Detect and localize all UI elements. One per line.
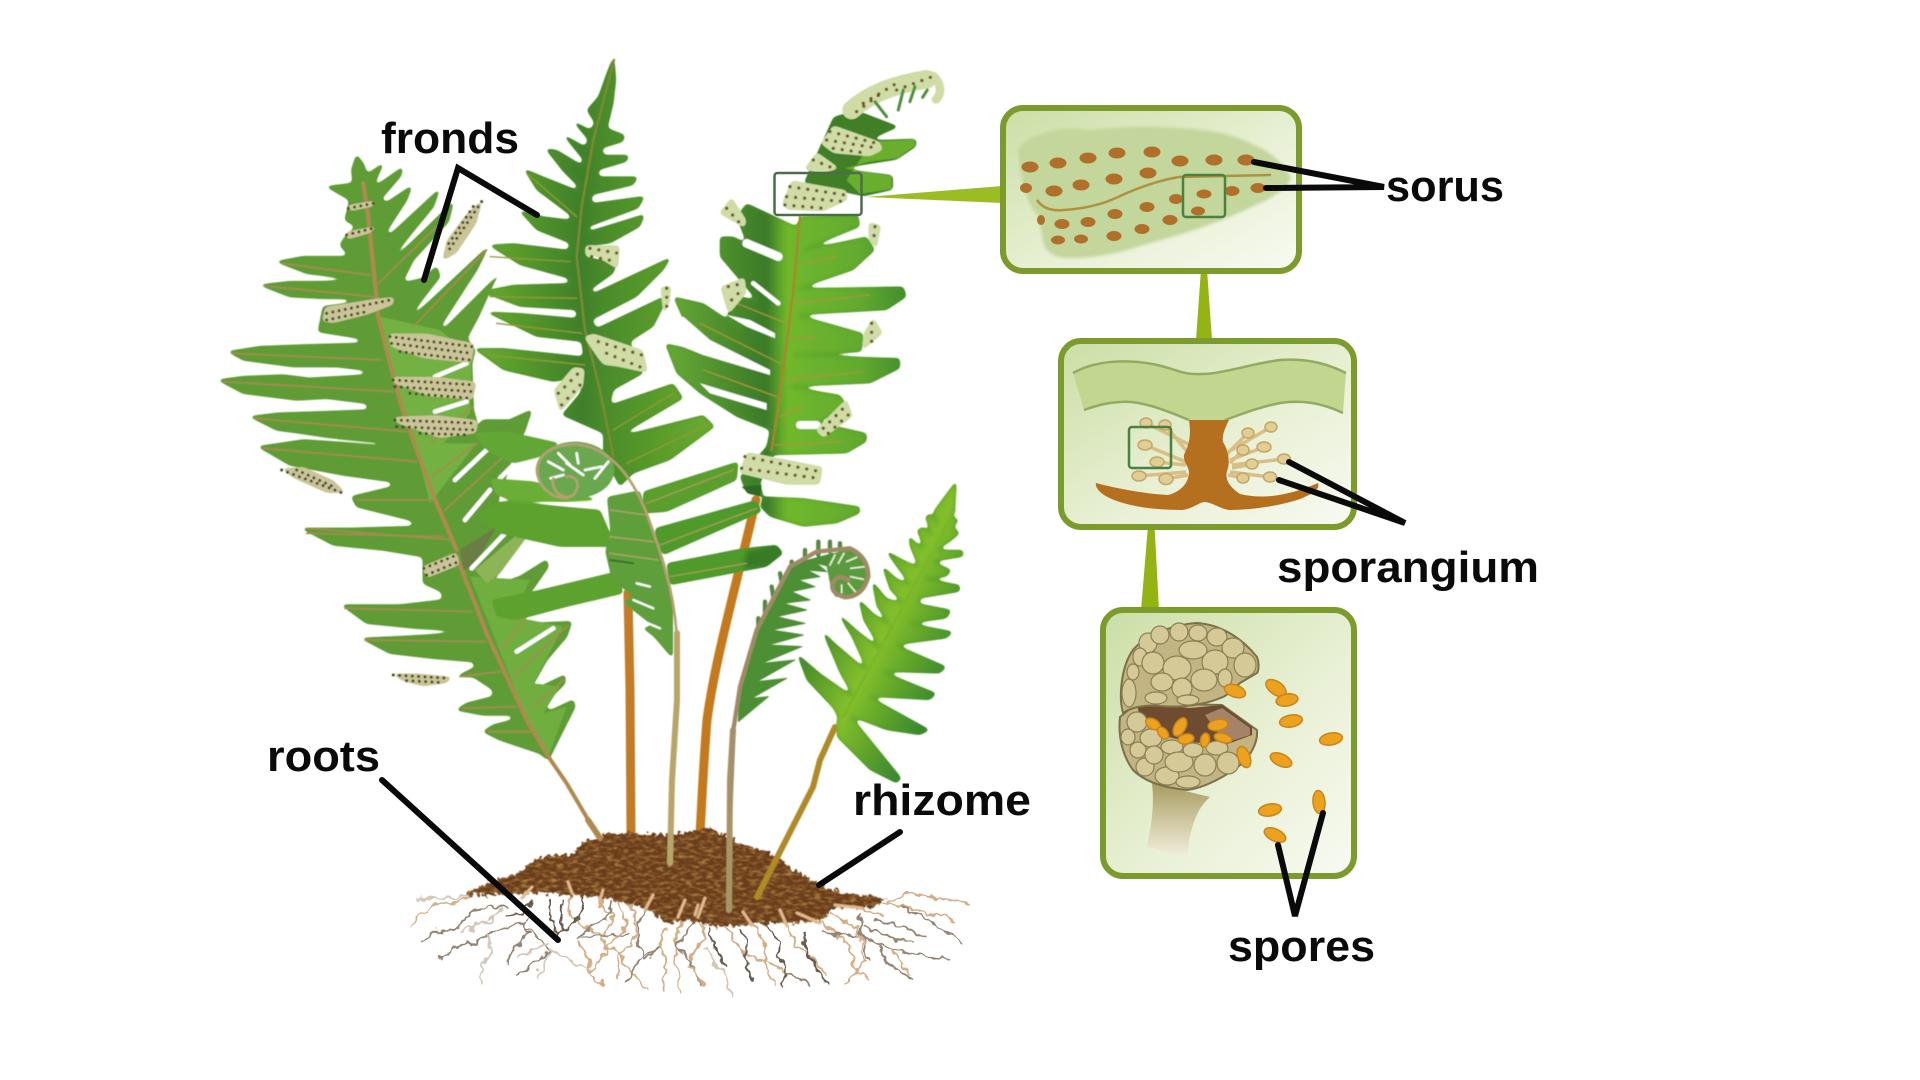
label: roots: [267, 732, 558, 940]
upper capsule: [1121, 623, 1259, 713]
lighter side of the blade: [470, 577, 567, 757]
label: rhizome: [819, 776, 1031, 885]
receptacle stalk: [1096, 420, 1318, 510]
fern plant illustration: [218, 55, 963, 927]
frond: fiddlehead leaves and crozier: [473, 432, 783, 660]
connector: frond to sorus panel: [866, 186, 1002, 203]
panel: sporangium cross-section: [1061, 341, 1354, 527]
label: sorus: [1254, 162, 1504, 211]
crozier coil: [536, 442, 614, 498]
spore patches on left frond: [280, 198, 483, 493]
label: fronds: [381, 114, 537, 280]
curled tip: [803, 110, 917, 197]
panel: spore release: [1103, 610, 1354, 876]
folded blade: [605, 490, 673, 660]
stems in front of the mound: [588, 633, 835, 910]
highlight box on sorus: [1183, 175, 1225, 217]
connector: sorus to sporangium panel: [1196, 227, 1212, 340]
spores: [1144, 676, 1343, 845]
frond: lower right frond: [797, 480, 963, 783]
frond: right fertile frond: [665, 75, 940, 527]
spore patches on central frond: [553, 245, 672, 413]
highlight box on sporangium: [1129, 427, 1171, 468]
sporangia stems: [1139, 423, 1284, 479]
label: roots: roots: [267, 732, 380, 781]
rootlets emerging from soil: [522, 882, 862, 926]
sporangia heads: [1132, 418, 1290, 484]
label: sorus: sorus: [1386, 162, 1504, 211]
right leaves of the central frond: [643, 462, 783, 585]
stems behind the mound: [628, 500, 756, 834]
panel: sorus: [1003, 108, 1299, 271]
label: spores: [1228, 813, 1375, 971]
sporangium stalk: [1147, 783, 1210, 857]
frond: central frond: [473, 55, 715, 487]
connector: sporangium to spore panel: [1141, 478, 1159, 610]
frond: left fertile frond: [218, 155, 598, 835]
label: sporangium: [1277, 462, 1539, 592]
capsule opening: [1137, 703, 1252, 745]
left leaves: [473, 432, 623, 620]
roots: [412, 882, 968, 997]
leaf band: [1073, 360, 1346, 420]
capsule cells: [1121, 623, 1256, 788]
soil: rhizome mound: [467, 828, 887, 927]
leaf section with sori: [1018, 127, 1291, 258]
highlight box on frond: [774, 173, 862, 215]
lower capsule: [1120, 703, 1257, 790]
label: fronds: fronds: [381, 114, 519, 163]
label: spores: spores: [1228, 922, 1375, 971]
frond: young frond with small crozier: [730, 542, 868, 810]
label: sporangium: sporangium: [1277, 543, 1539, 592]
label: rhizome: rhizome: [853, 776, 1031, 825]
